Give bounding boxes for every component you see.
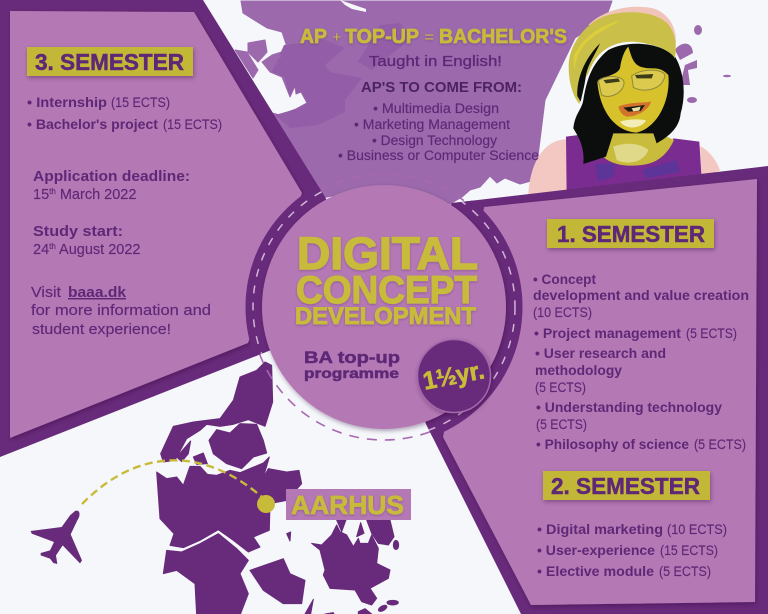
semester 1 courses: • Philosophy of science <box>536 437 689 452</box>
subtitle <box>304 348 400 381</box>
equation heading: BACHELOR'S <box>439 26 567 48</box>
portrait photo <box>528 7 720 197</box>
semester 2 courses <box>537 522 727 579</box>
programme title <box>295 228 478 330</box>
right arm <box>700 146 720 177</box>
semester 1 courses: (10 ECTS) <box>533 305 592 320</box>
aarhus marker <box>257 495 275 513</box>
equation heading <box>300 26 567 48</box>
semester 2 courses: (5 ECTS) <box>659 564 711 579</box>
equation heading: = <box>424 29 434 46</box>
visit note <box>31 285 211 338</box>
road ring right <box>425 200 522 437</box>
equation heading: TOP-UP <box>345 26 419 48</box>
semester 1 courses: • Concept <box>533 272 597 287</box>
visit note: Visit <box>31 285 61 301</box>
programme title: DEVELOPMENT <box>295 303 476 330</box>
world map panel <box>235 0 612 204</box>
course list: • Bachelor's project <box>27 117 159 132</box>
neck highlight <box>613 144 648 163</box>
panel frame <box>426 166 768 614</box>
face <box>597 47 669 133</box>
application deadline: th <box>49 187 56 196</box>
semester 1 courses: development and value creation <box>533 288 749 303</box>
course list <box>27 95 222 132</box>
study start: Study start: <box>33 224 123 240</box>
visit note: student experience! <box>32 322 171 338</box>
panel fill <box>10 11 302 438</box>
semester 2 courses: • User-experience <box>537 543 656 558</box>
semester 1 courses: (5 ECTS) <box>686 326 737 341</box>
study start: August 2022 <box>56 242 140 258</box>
road ring left <box>246 186 326 356</box>
ap list: • Business or Computer Science <box>338 148 539 163</box>
study start: 24 <box>33 242 49 258</box>
eyes <box>603 74 653 83</box>
ap list heading: AP'S TO COME FROM: <box>361 79 522 96</box>
application deadline: March 2022 <box>56 187 136 203</box>
icon: airplane <box>31 511 82 564</box>
taught in english: Taught in English! <box>369 53 502 70</box>
course list: • Internship <box>27 95 107 110</box>
semester 1 courses: (5 ECTS) <box>536 417 587 432</box>
programme title: CONCEPT <box>296 269 477 312</box>
semester 2 courses: • Elective module <box>537 564 655 579</box>
semester 1 courses: (5 ECTS) <box>694 437 746 452</box>
subtitle: BA top-up <box>304 348 400 367</box>
panel frame <box>0 0 325 457</box>
semester 1 courses <box>533 272 749 452</box>
programme title: DIGITAL <box>297 228 478 279</box>
dress <box>566 134 702 197</box>
ap list: • Multimedia Design <box>373 101 499 116</box>
ap list <box>338 101 539 163</box>
ap list: • Marketing Management <box>354 117 510 132</box>
subtitle: programme <box>304 365 399 381</box>
semester 1 courses: • Understanding technology <box>536 400 723 415</box>
study start <box>33 224 140 258</box>
semester 2 courses: • Digital marketing <box>537 522 663 537</box>
paint splatters <box>675 25 731 103</box>
flight path <box>82 460 262 504</box>
ap list: • Design Technology <box>372 133 497 148</box>
left arm <box>528 139 570 194</box>
course list: (15 ECTS) <box>111 95 170 110</box>
equation heading: + <box>332 29 341 46</box>
central circle <box>262 185 506 429</box>
beret <box>569 12 676 104</box>
beret shade <box>577 43 600 102</box>
semester 1 label: 1. SEMESTER <box>557 221 705 247</box>
glasses <box>598 70 665 96</box>
beret back <box>588 7 676 43</box>
dashed orbit <box>251 174 517 440</box>
panel: semesters 1 and 2 <box>426 166 768 614</box>
neck <box>602 120 674 166</box>
duration badge: 1½yr. <box>421 356 487 396</box>
semester 1 courses: methodology <box>535 363 622 378</box>
duration badge <box>418 340 490 412</box>
aarhus label: AARHUS <box>291 490 404 520</box>
smile <box>618 102 651 117</box>
semester 2 label: 2. SEMESTER <box>551 473 700 499</box>
semester 1 courses: • User research and <box>535 346 666 361</box>
semester 1 courses: (5 ECTS) <box>535 380 586 395</box>
application deadline: 15 <box>33 187 49 203</box>
panel: 3. semester <box>0 0 325 457</box>
visit note: baaa.dk <box>68 285 127 301</box>
equation heading: AP <box>300 26 327 48</box>
semester 2 courses: (10 ECTS) <box>667 522 727 537</box>
visit note: for more information and <box>31 303 211 319</box>
panel fill <box>443 179 757 605</box>
study start: th <box>49 242 56 251</box>
semester 2 courses: (15 ECTS) <box>660 543 718 558</box>
beret highlight <box>573 21 620 72</box>
denmark map <box>157 362 399 614</box>
chin highlight <box>620 119 646 127</box>
semester label: 3. SEMESTER <box>35 49 184 75</box>
hair <box>573 44 684 164</box>
course list: (15 ECTS) <box>163 117 222 132</box>
application deadline: Application deadline: <box>33 169 190 185</box>
application deadline <box>33 169 190 203</box>
semester 1 courses: • Project management <box>534 326 682 341</box>
dress shading <box>595 160 680 182</box>
top text block <box>300 26 567 163</box>
